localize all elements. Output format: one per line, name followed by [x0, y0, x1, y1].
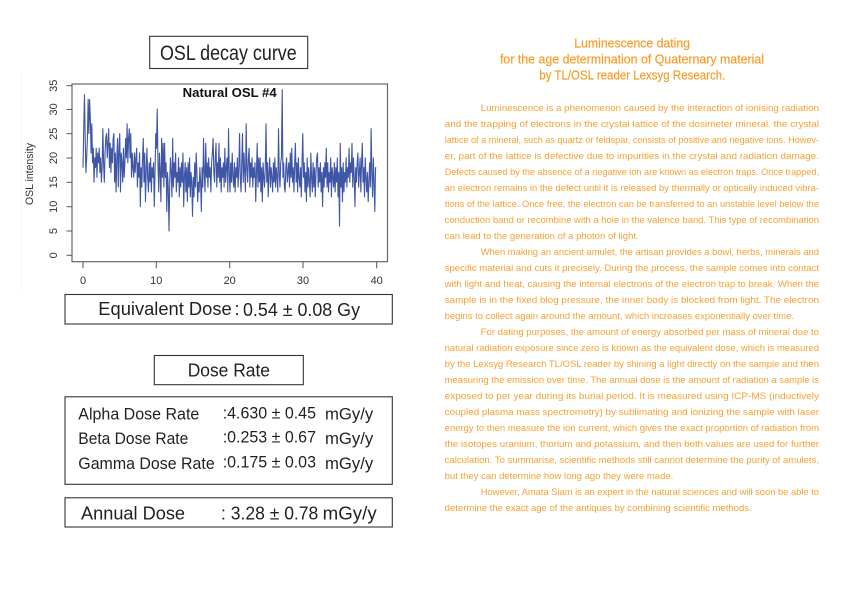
- x axis labels: [80, 275, 383, 287]
- heading: OSL decay curve: OSL decay curve: [160, 42, 297, 65]
- text block: paragraph 1: conduction band or recombine with a hole in the valence band. This type of recombination: [445, 214, 819, 225]
- row: alpha dose rate: :4.630 ± 0.45: [223, 403, 316, 422]
- text block: paragraph 3: but they can determine how long ago they were made.: [445, 470, 673, 481]
- text block: paragraph 3: natural radiation exposure since zero is known as the equivalent dose, which is measured: [445, 342, 819, 353]
- panel: equivalent dose: :: [234, 298, 240, 319]
- text block: paragraph 3: exposed to per year during its burial period. It is measured using ICP-MS (inductively: [445, 390, 819, 401]
- text block: paragraph 1: Luminescence is a phenomenon caused by the interaction of ionising radiation: [481, 102, 819, 113]
- x axis labels: 0: [80, 275, 86, 287]
- heading: dose rate: [154, 356, 303, 385]
- text block: paragraph 1: er, part of the lattice is defective due to impurities in the crystal and radiation damage.: [445, 150, 819, 161]
- y axis title: OSL intensity: [24, 143, 36, 205]
- text block: paragraph 3: [445, 326, 819, 481]
- x axis ticks: [83, 262, 377, 268]
- text block: paragraph 2: specific material and cuts it precisely. During the process, the sample comes into contact: [445, 262, 819, 273]
- row: gamma dose rate: Gamma Dose Rate: [78, 454, 215, 473]
- text block: paragraph 2: [444, 246, 819, 321]
- row: alpha dose rate: [78, 403, 374, 424]
- row: beta dose rate: mGy/y: [325, 429, 374, 448]
- text block: paragraph 4: However, Amata Siam is an expert in the natural sciences and will soon be able to: [481, 486, 819, 497]
- text block: paragraph 3: measuring the emission over time. The annual dose is the amount of radiation a sample is: [445, 374, 819, 385]
- text block: paragraph 3: by the Lexsyg Research TL/OSL reader by shining a light directly on the sample and then: [445, 358, 819, 369]
- y axis labels: 25: [48, 128, 60, 140]
- row: gamma dose rate: [78, 453, 374, 473]
- y axis labels: 0: [48, 252, 60, 258]
- text block: paragraph 3: the isotopes uranium, thorium and potassium, and then both values are used for further: [445, 438, 819, 449]
- text block: paragraph 1: Defects caused by the absence of a negative ion are known as electron traps. Once trapped,: [445, 166, 819, 177]
- panel: annual dose: [65, 498, 392, 527]
- row: beta dose rate: [78, 428, 374, 448]
- text block: paragraph 2: begins to collect again around the amount, which increases exponentially over time.: [445, 310, 794, 321]
- text block: paragraph 4: determine the exact age of the antiques by combining scientific methods.: [445, 502, 752, 513]
- heading: luminescence dating title: for the age determination of Quaternary material: [500, 52, 764, 66]
- text block: paragraph 4: [445, 486, 819, 513]
- text block: paragraph 2: When making an ancient amulet, the artisan provides a bowl, herbs, minerals and: [481, 246, 819, 257]
- heading: dose rate: Dose Rate: [188, 360, 270, 381]
- x axis labels: 30: [297, 275, 309, 287]
- text block: paragraph 1: and the trapping of electrons in the crystal lattice of the dosimeter mineral. the crystal: [445, 118, 819, 129]
- text block: paragraph 3: calculation. To summarise, scientific methods still cannot determine the purity of amulets,: [445, 454, 819, 465]
- y axis labels: 30: [48, 103, 60, 116]
- text block: paragraph 2: sample is in the fixed blog pressure, the inner body is blocked from light. The electron: [445, 294, 819, 305]
- panel: dose rate table: [65, 397, 392, 484]
- y axis labels: 20: [48, 152, 60, 164]
- x axis labels: 10: [150, 275, 162, 287]
- panel: annual dose: Annual Dose: [81, 502, 185, 523]
- chart title: Natural OSL #4: [183, 85, 277, 100]
- row: gamma dose rate: :0.175 ± 0.03: [223, 453, 316, 472]
- chart: natural OSL decay line chart: [24, 80, 388, 287]
- y axis labels: 15: [48, 176, 60, 188]
- y axis labels: 35: [48, 80, 60, 92]
- heading: luminescence dating title: Luminescence dating: [574, 36, 690, 50]
- y axis ticks: [66, 86, 72, 255]
- x axis labels: 40: [371, 275, 383, 287]
- panel: annual dose: : 3.28 ± 0.78: [221, 502, 318, 523]
- text block: paragraph 1: can lead to the generation of a photon of light.: [445, 230, 639, 241]
- row: alpha dose rate: Alpha Dose Rate: [78, 404, 199, 424]
- row: beta dose rate: Beta Dose Rate: [78, 429, 188, 448]
- row: gamma dose rate: mGy/y: [325, 454, 374, 473]
- text block: paragraph 1: tions of the lattice. Once free, the electron can be transferred to an unstable level below the: [445, 198, 819, 209]
- text block: paragraph 3: For dating purposes, the amount of energy absorbed per mass of mineral due to: [481, 326, 819, 337]
- text block: paragraph 3: coupled plasma mass spectrometry) by sublimating and ionizing the sample with laser: [445, 406, 819, 417]
- panel: equivalent dose: [65, 294, 392, 324]
- panel: equivalent dose: 0.54 ± 0.08 Gy: [243, 299, 361, 320]
- text block: paragraph 1: an electron remains in the defect until it is released by thermally or optically induced vibra-: [445, 182, 819, 193]
- text block: paragraph 1: [445, 102, 819, 241]
- heading: OSL decay curve: [150, 36, 308, 68]
- panel: equivalent dose: Equivalent Dose: [98, 298, 232, 319]
- text block: paragraph 2: with light and heat, causing the internal electrons of the electron trap to break. When the: [444, 278, 819, 289]
- data line: [83, 90, 376, 231]
- row: beta dose rate: :0.253 ± 0.67: [223, 428, 316, 447]
- y axis labels: 10: [48, 201, 60, 213]
- heading: luminescence dating title: by TL/OSL reader Lexsyg Research.: [539, 68, 725, 82]
- y axis labels: 5: [48, 228, 60, 234]
- panel: annual dose: mGy/y: [323, 502, 377, 523]
- y axis labels: [48, 80, 60, 258]
- row: alpha dose rate: mGy/y: [325, 404, 374, 424]
- text block: paragraph 3: energy to then measure the ion current, which gives the exact proportion of radiation from: [445, 422, 819, 433]
- heading: luminescence dating title: [500, 36, 764, 82]
- plot frame: [72, 84, 388, 262]
- x axis labels: 20: [224, 275, 236, 287]
- text block: paragraph 1: lattice of a mineral, such as quartz or feldspar, consists of positive and negative ions. Howev-: [445, 134, 819, 145]
